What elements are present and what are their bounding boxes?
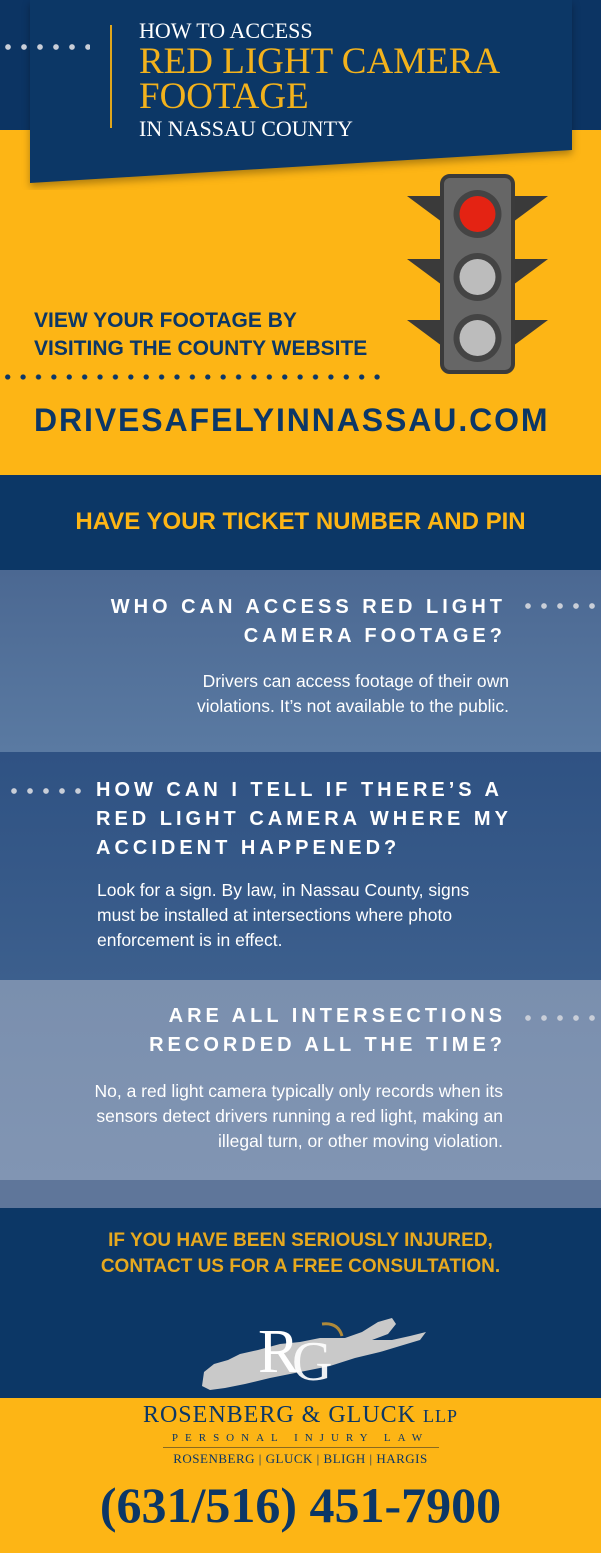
cta section: CONTACT US FOR A FREE CONSULTATION. [101, 1256, 500, 1277]
panel: how can I tell: RED LIGHT CAMERA WHERE MY [96, 808, 512, 830]
firm name: ROSENBERG | GLUCK | BLIGH | HARGIS [173, 1451, 428, 1466]
firm name: ROSENBERG & GLUCK LLP [143, 1402, 458, 1428]
title text: FOOTAGE [139, 76, 309, 117]
panel: how can I tell: Look for a sign. By law, in Nassau County, signs [97, 880, 469, 900]
title text [139, 18, 500, 141]
panel: all intersections: No, a red light camera typically only records when its [94, 1081, 503, 1101]
logo: G [292, 1331, 332, 1393]
title banner [26, 4, 576, 190]
top navy background [0, 0, 601, 130]
panel: all intersections: sensors detect drivers running a red light, making an [96, 1106, 503, 1126]
title text: RED LIGHT CAMERA [139, 41, 500, 82]
text: view footage: VIEW YOUR FOOTAGE BY [34, 309, 297, 332]
icon: traffic light [407, 174, 548, 374]
logo: R [258, 1318, 300, 1386]
website url: DRIVESAFELYINNASSAU.COM [34, 402, 549, 438]
panel: how can I tell: enforcement is in effect. [97, 930, 282, 950]
panel: who can access: WHO CAN ACCESS RED LIGHT [111, 596, 506, 618]
panel: who can access: Drivers can access footage of their own [203, 671, 509, 691]
text: view footage [34, 309, 367, 360]
band: ticket number: HAVE YOUR TICKET NUMBER AND PIN [75, 508, 526, 535]
panel: all intersections [0, 980, 601, 1180]
panel: all intersections: illegal turn, or other moving violation. [218, 1131, 503, 1151]
phone number: (631/516) 451-7900 [100, 1477, 501, 1533]
cta section [0, 1208, 601, 1398]
title text: IN NASSAU COUNTY [139, 116, 353, 141]
panel: how can I tell: must be installed at intersections where photo [97, 905, 452, 925]
title text: HOW TO ACCESS [139, 18, 313, 43]
panel: who can access: violations. It’s not available to the public. [197, 696, 509, 716]
band: ticket number [0, 475, 601, 570]
firm name [143, 1402, 458, 1466]
panel: how can I tell: ACCIDENT HAPPENED? [96, 837, 400, 859]
cta section: IF YOU HAVE BEEN SERIOUSLY INJURED, [108, 1230, 493, 1251]
panel: how can I tell [0, 752, 601, 980]
panel: all intersections: ARE ALL INTERSECTIONS [169, 1005, 506, 1027]
firm name: PERSONAL INJURY LAW [172, 1432, 429, 1444]
logo [202, 1318, 426, 1393]
panel: how can I tell: HOW CAN I TELL IF THERE’S A [96, 779, 503, 801]
panel: all intersections: RECORDED ALL THE TIME? [149, 1034, 506, 1056]
panel: who can access: CAMERA FOOTAGE? [244, 625, 506, 647]
yellow area [0, 130, 601, 475]
panel: who can access [0, 570, 601, 752]
text: view footage: VISITING THE COUNTY WEBSITE [34, 337, 367, 360]
